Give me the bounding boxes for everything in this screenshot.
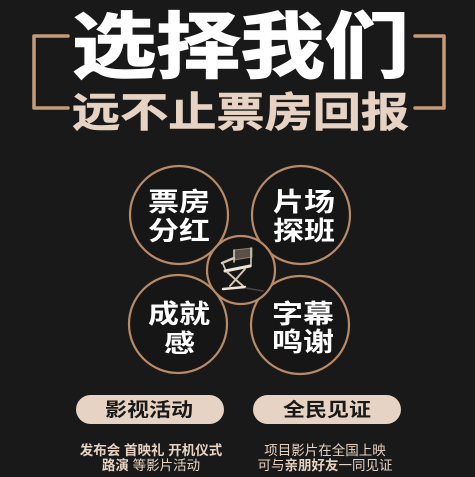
circle: box office dividend: 分红 — [148, 216, 210, 246]
text block: film events: 路演 等影片活动 — [102, 457, 200, 473]
title: 选择我们 — [72, 8, 409, 88]
text block: witness together: 可与亲朋好友一同见证 — [258, 457, 392, 473]
text block: witness together — [258, 442, 392, 473]
text block: film events: 发布会 首映礼 开机仪式 — [80, 442, 223, 458]
circle: box office dividend: 票房 — [148, 187, 210, 217]
left bracket — [34, 36, 68, 108]
circle: credits thanks: 字幕 — [272, 299, 334, 329]
text block: film events — [80, 442, 223, 473]
circle: set visit: 探班 — [273, 216, 335, 246]
pill: witness together: 全民见证 — [283, 398, 371, 421]
circle: credits thanks: 鸣谢 — [272, 327, 334, 357]
circle: sense of achievement: 感 — [164, 329, 195, 358]
circle: box office dividend — [130, 166, 228, 264]
circle: sense of achievement — [129, 275, 227, 373]
text block: witness together: 项目影片在全国上映 — [264, 442, 386, 458]
pill: film events: 影视活动 — [105, 399, 193, 421]
subtitle: 远不止票房回报 — [72, 90, 409, 136]
pill: film events — [76, 395, 224, 424]
icon: director chair — [222, 248, 263, 291]
right bracket — [415, 36, 444, 108]
center circle — [207, 236, 275, 304]
circle: set visit: 片场 — [273, 187, 335, 217]
circle: sense of achievement: 成就 — [148, 299, 210, 329]
circle: set visit — [252, 166, 350, 264]
pill: witness together — [253, 395, 401, 424]
circle: credits thanks — [251, 276, 349, 374]
